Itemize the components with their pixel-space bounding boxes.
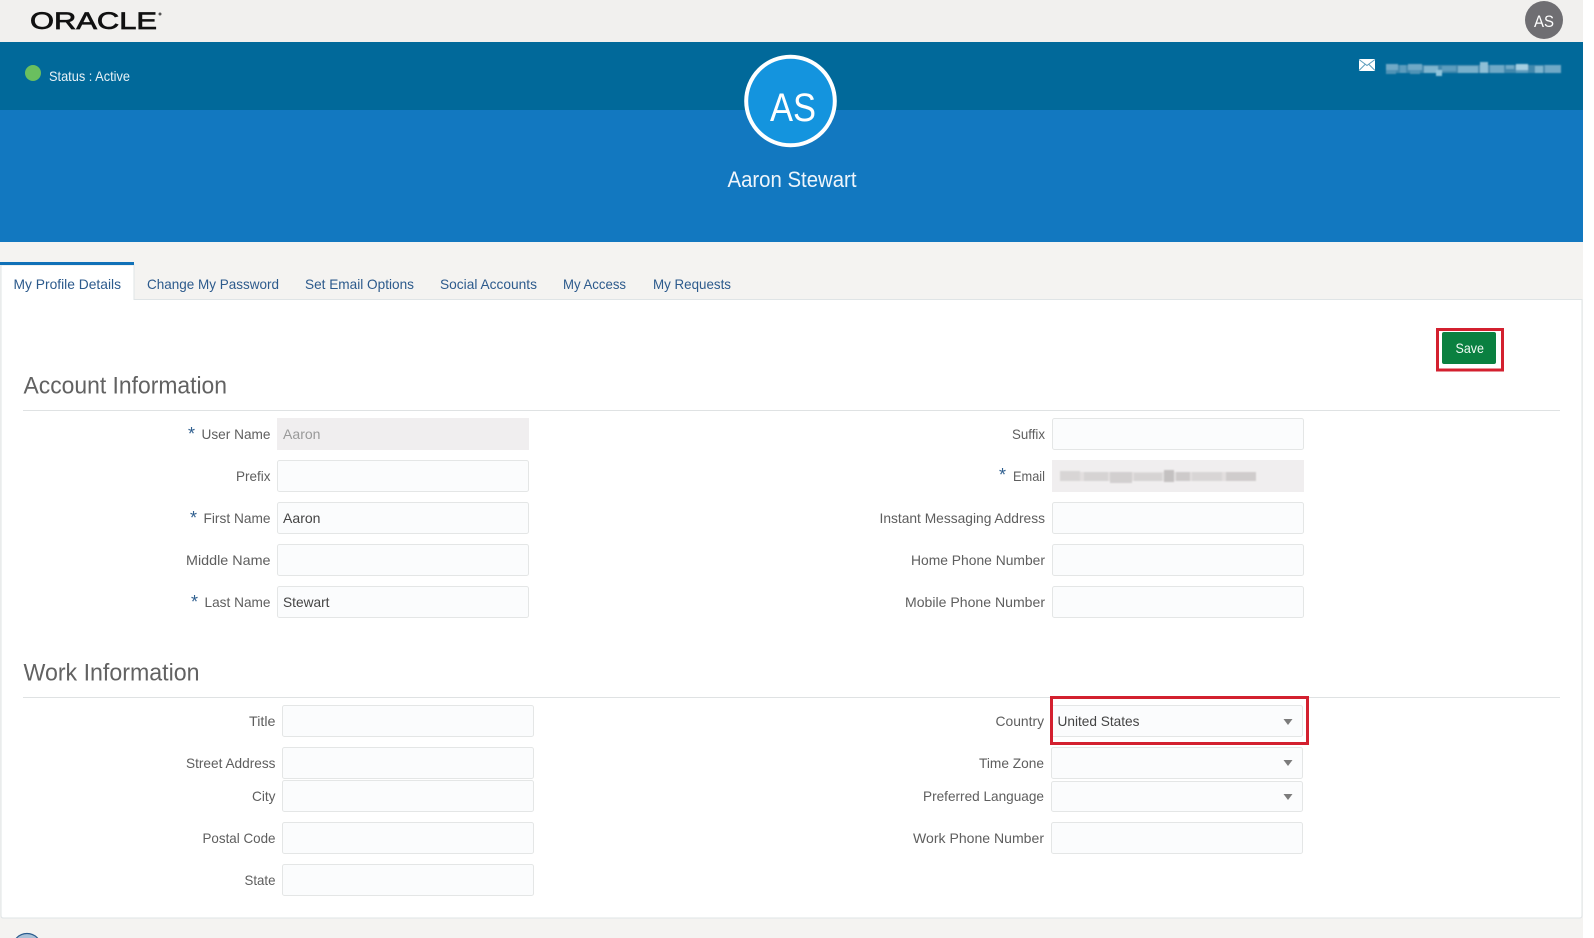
user name: Aaron Stewart bbox=[728, 167, 856, 192]
field: Title: Title bbox=[249, 713, 276, 729]
field: Suffix bbox=[1012, 418, 1304, 450]
field: Preferred Language: Preferred Language bbox=[923, 788, 1044, 804]
field: User Name bbox=[188, 418, 529, 450]
field: Country with red highlight: United States bbox=[1058, 713, 1140, 729]
field: Email bbox=[999, 460, 1304, 492]
field: Middle Name bbox=[186, 544, 528, 576]
field: Email: * bbox=[999, 465, 1006, 485]
field: Country with red highlight bbox=[996, 698, 1308, 744]
tab bar bbox=[0, 262, 731, 292]
field: First Name: * bbox=[190, 508, 197, 528]
logo: Oracle: ORACLE bbox=[30, 9, 157, 35]
tab: Set Email Options: Set Email Options bbox=[305, 276, 414, 292]
icon: user avatar small: AS bbox=[1534, 12, 1554, 31]
field: State bbox=[244, 864, 534, 896]
field: First Name bbox=[190, 502, 528, 534]
field: Postal Code: Postal Code bbox=[202, 830, 276, 846]
blurred email address bbox=[1386, 62, 1561, 76]
tab: My Profile Details: My Profile Details bbox=[14, 276, 121, 292]
tab: Social Accounts: Social Accounts bbox=[440, 276, 537, 292]
field: Prefix: Prefix bbox=[236, 468, 270, 484]
field: First Name: First Name bbox=[204, 510, 271, 526]
tab: Change My Password: Change My Password bbox=[147, 276, 279, 292]
section: account fields right bbox=[880, 418, 1304, 618]
field: Time Zone: Time Zone bbox=[979, 755, 1044, 771]
field: Prefix bbox=[236, 460, 528, 492]
large avatar: AS bbox=[770, 86, 816, 130]
heading: Account Information: Account Information bbox=[24, 372, 227, 400]
status indicator: Status : Active bbox=[49, 68, 130, 84]
field: Suffix: Suffix bbox=[1012, 426, 1045, 442]
field: Preferred Language bbox=[923, 782, 1302, 812]
field: Instant Messaging Address: Instant Messaging Address bbox=[880, 510, 1045, 526]
field: User Name: * bbox=[188, 424, 195, 444]
field: Last Name: Stewart bbox=[283, 594, 330, 610]
top header bar bbox=[0, 0, 1583, 42]
large avatar bbox=[746, 57, 835, 145]
tab: My Access: My Access bbox=[563, 276, 626, 292]
field: City bbox=[252, 780, 534, 812]
field: Title bbox=[249, 706, 534, 736]
field: Last Name: * bbox=[191, 592, 198, 612]
section: work fields right bbox=[913, 698, 1308, 854]
field: Last Name bbox=[191, 586, 528, 618]
field: Home Phone Number: Home Phone Number bbox=[911, 552, 1045, 568]
field: Home Phone Number bbox=[911, 544, 1304, 576]
field: Time Zone bbox=[979, 748, 1302, 778]
save button with red highlight bbox=[1438, 330, 1502, 370]
field: Last Name: Last Name bbox=[204, 594, 271, 610]
tab: My Requests: My Requests bbox=[653, 276, 731, 292]
section: work fields left bbox=[186, 706, 534, 896]
field: Work Phone Number bbox=[913, 822, 1302, 854]
field: User Name: User Name bbox=[202, 426, 271, 442]
field: First Name: Aaron bbox=[283, 510, 320, 526]
field: Email: Email bbox=[1013, 468, 1045, 484]
field: User Name: Aaron bbox=[283, 426, 320, 442]
section: account fields left bbox=[186, 418, 529, 618]
status indicator bbox=[25, 65, 130, 84]
field: Mobile Phone Number bbox=[905, 586, 1304, 618]
save button with red highlight: Save bbox=[1456, 340, 1484, 356]
field: Work Phone Number: Work Phone Number bbox=[913, 830, 1044, 846]
icon: user avatar small bbox=[1525, 1, 1563, 39]
field: Instant Messaging Address bbox=[880, 502, 1304, 534]
panel: profile form bbox=[1, 265, 1582, 918]
heading: Work Information: Work Information bbox=[24, 660, 200, 686]
profile banner bbox=[0, 42, 1583, 242]
field: City: City bbox=[252, 788, 276, 804]
field: Street Address: Street Address bbox=[186, 755, 276, 771]
field: Postal Code bbox=[202, 822, 534, 854]
field: Country with red highlight: Country bbox=[996, 713, 1044, 729]
icon: envelope bbox=[1359, 59, 1375, 71]
field: Mobile Phone Number: Mobile Phone Number bbox=[905, 594, 1045, 610]
icon: footer globe bbox=[12, 934, 42, 938]
field: Middle Name: Middle Name bbox=[186, 552, 271, 568]
field: Street Address bbox=[186, 748, 534, 778]
field: State: State bbox=[244, 872, 276, 888]
